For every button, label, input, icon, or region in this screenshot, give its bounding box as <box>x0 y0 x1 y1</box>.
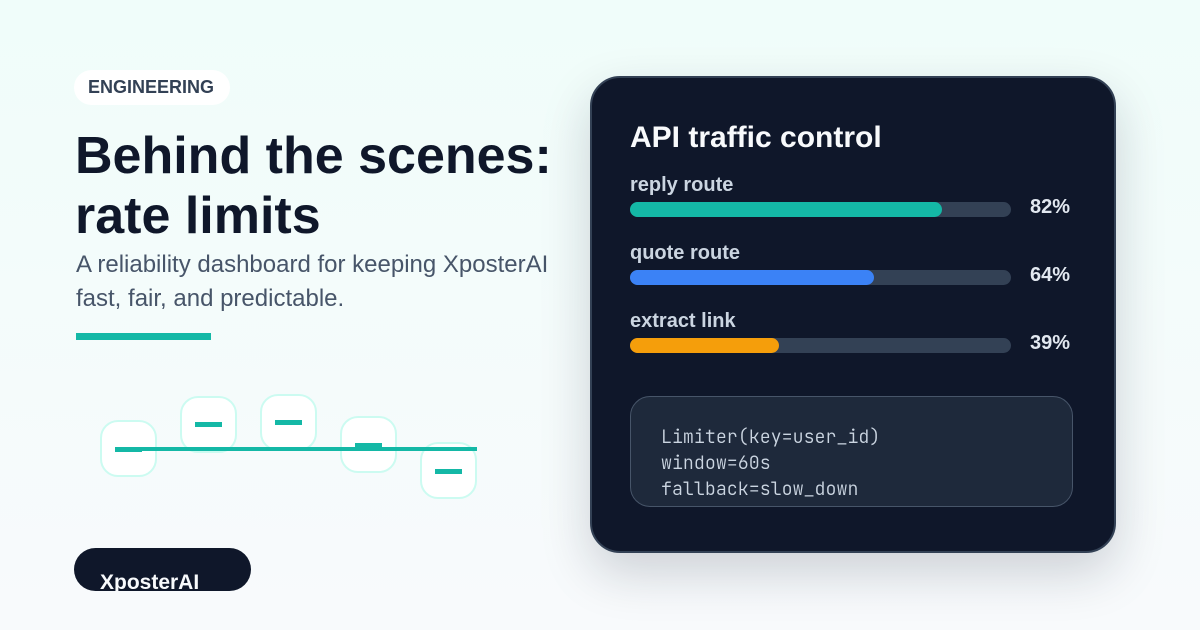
tile 2 <box>180 396 237 453</box>
panel: API traffic control <box>590 76 1116 553</box>
tile 5 <box>420 442 477 499</box>
label: quote route: quote route <box>630 242 740 264</box>
code box: window=60s <box>661 451 771 475</box>
title <box>75 127 552 245</box>
tile 4 dash <box>355 443 382 448</box>
value: 64%: 64% <box>1030 264 1070 286</box>
tile 5 dash <box>435 469 462 474</box>
tile 3 <box>260 394 317 451</box>
label: reply route: reply route <box>630 174 733 196</box>
value: 82%: 82% <box>1030 196 1070 218</box>
code box: Limiter(key=user_id) <box>661 425 880 449</box>
tile 4 <box>340 416 397 473</box>
bar: reply route 82% <box>630 202 1011 217</box>
label: extract link: extract link <box>630 310 736 332</box>
tag pill: engineering: ENGINEERING <box>88 77 214 97</box>
code box: fallback=slow_down <box>661 477 858 501</box>
tile 3 dash <box>275 420 302 425</box>
tile 1 <box>100 420 157 477</box>
tile 2 dash <box>195 422 222 427</box>
code box <box>630 396 1073 507</box>
subtitle: A reliability dashboard for keeping XposterAI <box>76 251 548 278</box>
bar: extract link 39% <box>630 338 1011 353</box>
title: rate limits <box>75 187 321 245</box>
tile 1 dash <box>115 447 142 452</box>
subtitle: fast, fair, and predictable. <box>76 285 344 312</box>
title: Behind the scenes: <box>75 127 552 185</box>
bar: quote route 64% <box>630 270 1011 285</box>
rate limit tile diagram <box>100 394 477 499</box>
brand pill <box>74 548 251 591</box>
baseline <box>115 447 477 451</box>
value: 39%: 39% <box>1030 332 1070 354</box>
accent bar <box>76 333 211 340</box>
tag pill: engineering <box>74 70 230 105</box>
panel heading: API traffic control <box>630 121 882 154</box>
subtitle <box>76 251 548 312</box>
